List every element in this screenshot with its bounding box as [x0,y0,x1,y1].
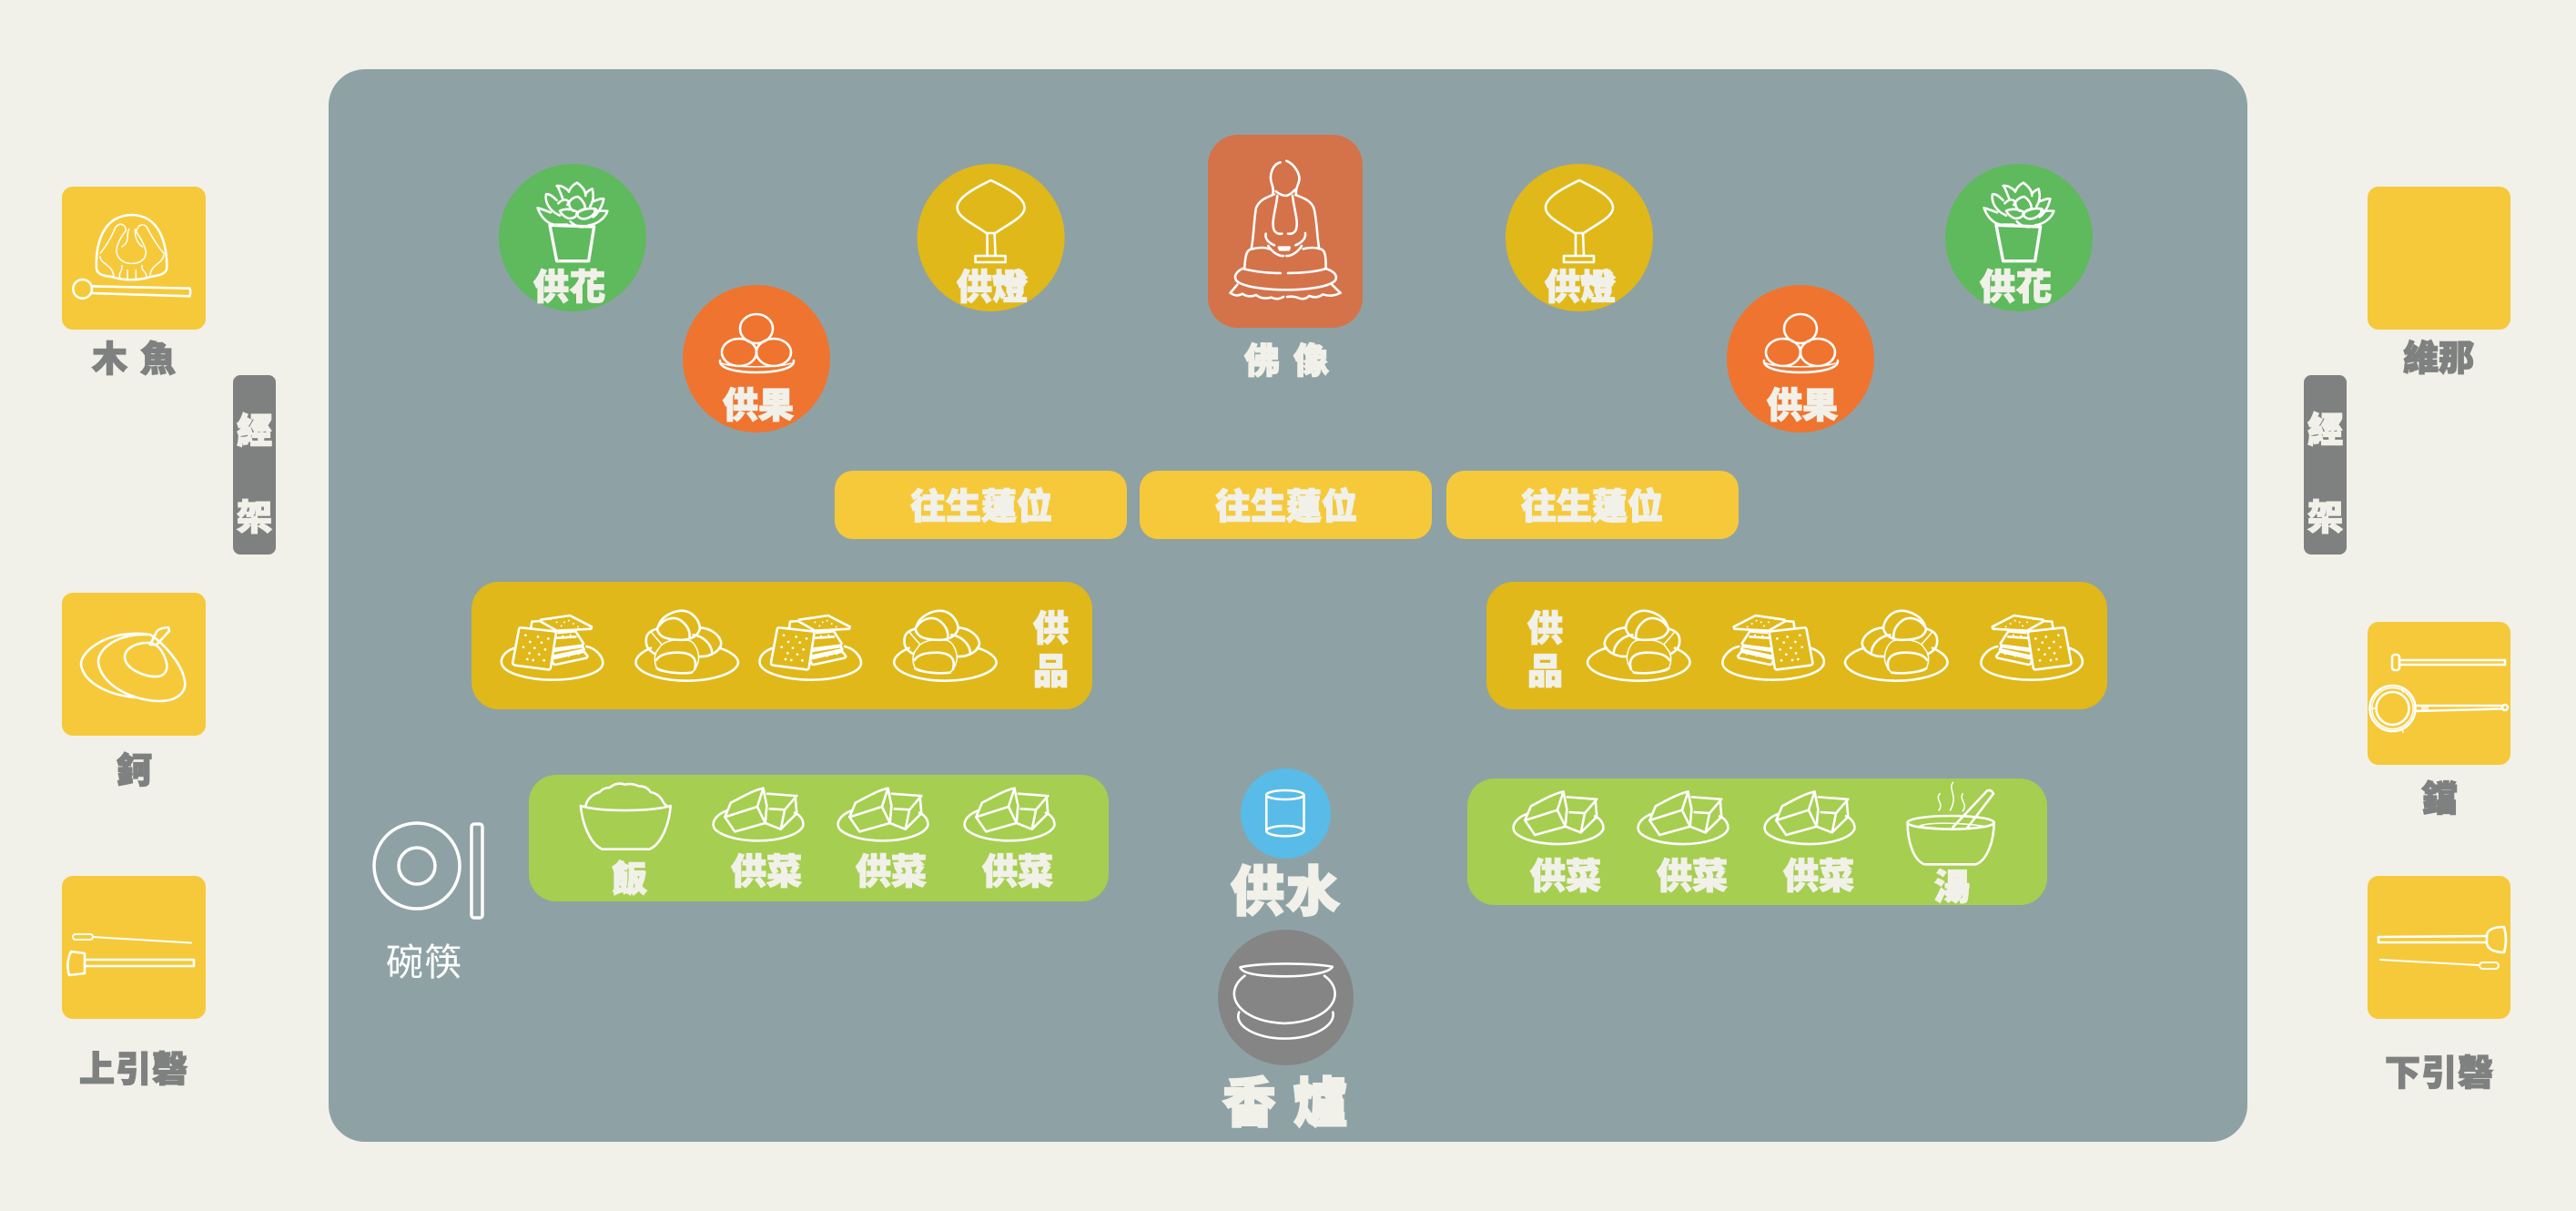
panel: meal left 飯 供菜 [529,775,1109,901]
bowl and chopsticks 碗筷 [374,823,482,983]
offering: water 供水: 供水 [1231,862,1340,922]
panel: meal right 供菜 湯 [1467,778,2047,908]
offering: lamp right 供燈: 供燈 [1545,269,1616,308]
offering: fruit left 供果 [683,285,830,432]
icon: dish [838,789,928,840]
offering: lamp right 供燈 [1506,164,1653,311]
offering: flowers right 供花: 供花 [1980,269,2052,308]
incense burner 香爐: 香爐 [1222,1074,1347,1134]
label: dish: 供菜 [1783,858,1854,897]
icon: crackers [1722,616,1824,680]
memorial tablet 1 往生蓮位: 往生蓮位 [910,487,1052,527]
icon: buns [636,611,738,681]
memorial tablet 3 往生蓮位 [1446,471,1739,539]
icon: buns [1587,611,1689,681]
label: offerings: 品 [1033,653,1069,692]
Buddha statue 佛像: 佛像 [1244,342,1329,382]
label: dish: 供菜 [731,853,802,892]
offering: fruit right 供果: 供果 [1767,387,1838,426]
memorial tablet 2 往生蓮位 [1140,471,1432,539]
instrument: weina blank box 維那: 維那 [2403,340,2474,379]
sutra stand left 經架: 架 [237,499,272,538]
offering: lamp left 供燈 [918,164,1065,311]
offering: flowers left 供花 [499,164,646,311]
icon: dish [1638,791,1728,844]
instrument: wooden fish 木魚: 木魚 [92,341,176,380]
sutra stand right 經架: 架 [2307,499,2343,538]
bowl and chopsticks 碗筷: 碗筷 [386,941,461,983]
icon: rice bowl [581,784,671,850]
memorial tablet 1 往生蓮位 [835,471,1127,539]
instrument: wooden fish 木魚 [62,187,206,380]
instrument: cymbals 鈳: 鈳 [117,752,152,791]
panel: offerings right 供品 [1486,582,2107,709]
icon: dish [965,789,1054,840]
label: dish: 供菜 [856,853,927,892]
memorial tablet 2 往生蓮位: 往生蓮位 [1215,487,1357,527]
label: offerings: 供 [1033,610,1069,649]
label: offerings: 供 [1527,610,1563,649]
sutra stand left 經架: 經 [237,412,272,452]
panel: altar table [329,69,2247,1142]
instrument: upper bell striker 上引磬 [62,876,206,1090]
label: dish: 供菜 [1530,858,1601,897]
label: dish: 供菜 [1657,858,1728,897]
offering: water 供水 [1231,768,1340,922]
memorial tablet 3 往生蓮位: 往生蓮位 [1521,487,1663,527]
sutra stand right 經架 [2304,375,2347,555]
instrument: upper bell striker 上引磬: 上引磬 [79,1051,188,1090]
icon: dish [1765,791,1854,844]
instrument: cymbals 鈳 [62,593,206,791]
label: dish: 供菜 [982,853,1053,892]
incense burner 香爐 [1218,930,1354,1134]
sutra stand left 經架 [233,375,276,555]
icon: crackers [760,616,861,680]
icon: buns [894,611,997,681]
Buddha statue 佛像 [1208,135,1363,382]
instrument: lower bell striker 下引磬: 下引磬 [2385,1054,2493,1094]
offering: flowers right 供花 [1945,164,2093,311]
offering: fruit right 供果 [1727,285,1874,432]
icon: dish [1514,791,1603,844]
icon: crackers [1981,616,2083,680]
instrument: lower bell striker 下引磬 [2368,876,2510,1094]
offering: lamp left 供燈: 供燈 [957,269,1028,308]
label: rice: 飯 [612,860,647,900]
offering: fruit left 供果: 供果 [723,387,794,426]
icon: crackers [502,616,603,680]
icon: dish [714,789,803,840]
instrument: weina blank box 維那 [2368,187,2510,379]
icon: buns [1845,611,1947,681]
sutra stand right 經架: 經 [2307,412,2343,451]
panel: offerings left 供品 [472,582,1092,709]
label: offerings: 品 [1527,653,1563,692]
offering: flowers left 供花: 供花 [533,269,605,308]
label: soup: 湯 [1934,869,1970,908]
instrument: small gong 鐺 [2368,622,2510,819]
instrument: small gong 鐺: 鐺 [2421,780,2457,819]
icon: soup [1908,782,1994,864]
